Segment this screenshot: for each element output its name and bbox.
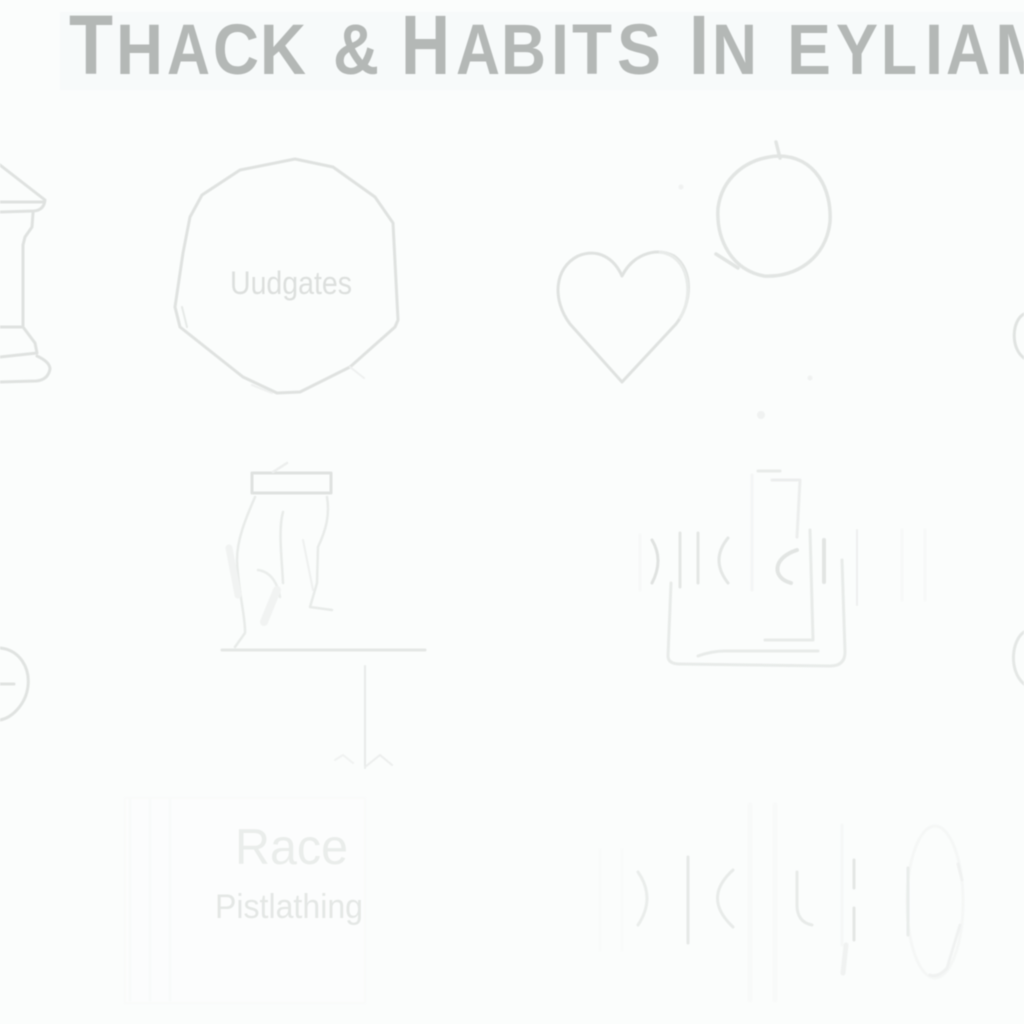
icon: heart [558, 252, 688, 382]
icon: right edge ring bottom [1013, 632, 1024, 684]
title: L [881, 11, 917, 90]
title: H [401, 0, 450, 92]
title: H [116, 11, 163, 90]
icon: polygon badge [175, 159, 398, 393]
icon: bracket bars [640, 471, 925, 666]
specks [678, 184, 812, 419]
icon: circular arrow [716, 142, 830, 276]
title: C [213, 11, 259, 90]
title [69, 0, 1024, 92]
title: Y [836, 11, 878, 90]
title: S [617, 11, 661, 90]
title: N [712, 11, 757, 90]
title: K [260, 11, 306, 90]
panel text: Pistlathing [215, 888, 363, 926]
icon: left edge ring bottom [0, 648, 28, 720]
title: E [787, 11, 831, 90]
title band [60, 12, 1024, 90]
panel: lower left [125, 798, 365, 1003]
title: A [167, 11, 210, 90]
title: B [501, 11, 546, 90]
badge label: Uudgates [230, 265, 352, 301]
title: T [572, 11, 612, 90]
icon: right edge ring top [1014, 314, 1024, 358]
title: I [689, 0, 709, 92]
title: & [333, 11, 379, 90]
title: A [456, 11, 500, 90]
panel heading: Race [235, 819, 348, 875]
icon: pillar left [0, 165, 50, 382]
icon: lower right bars [600, 805, 963, 1000]
title: I [551, 11, 569, 90]
title: T [69, 0, 113, 92]
title: A [946, 11, 990, 90]
icon: figure on platform [222, 463, 425, 650]
title: I [925, 11, 943, 90]
arrow down [335, 666, 392, 768]
